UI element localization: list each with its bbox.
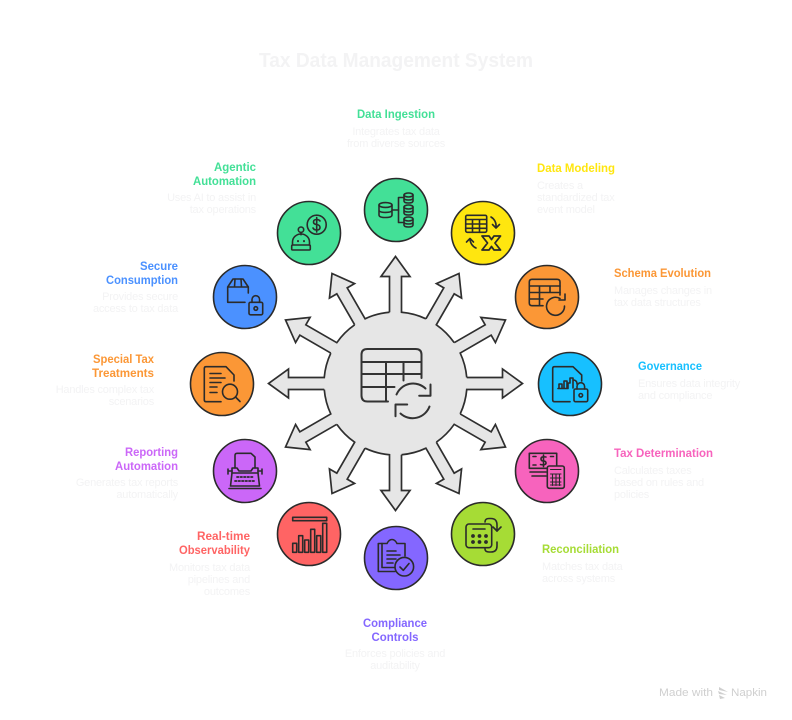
panel: Special Tax Treatments (56, 352, 254, 416)
description: Manages changes in (614, 285, 712, 297)
heading: Treatments (92, 366, 154, 380)
heading: Schema Evolution (614, 266, 711, 280)
icon: document with magnifier (190, 352, 254, 416)
icon: document chart with lock (538, 352, 602, 416)
panel: Governance (538, 352, 741, 416)
description: Ensures data integrity (638, 378, 741, 390)
description: standardized tax (537, 192, 615, 204)
panel: Agentic Automation (167, 160, 340, 264)
description: Matches tax data (542, 561, 624, 573)
heading: Data Ingestion (357, 107, 435, 121)
footer: Made with Napkin: Made with (659, 687, 713, 699)
icon: package with lock (214, 266, 276, 328)
description: scenarios (109, 396, 155, 408)
panel: Compliance Controls (345, 526, 445, 672)
icon: Napkin logo (718, 687, 728, 699)
description: Provides secure (102, 291, 178, 303)
description: across systems (542, 573, 616, 585)
description: policies (614, 489, 650, 501)
description: Monitors tax data (169, 562, 251, 574)
icon: robot bell with dollar coin (278, 202, 340, 264)
heading: Reconciliation (542, 542, 619, 556)
heading: Consumption (106, 273, 178, 287)
description: auditability (370, 660, 420, 672)
icon: databases (364, 178, 428, 242)
heading: Compliance (363, 616, 427, 630)
description: Generates tax reports (76, 477, 179, 489)
heading: Secure (140, 259, 178, 273)
description: Creates a (537, 180, 584, 192)
heading: Observability (179, 543, 250, 557)
icon: money and calculator (516, 440, 578, 502)
panel: Tax Determination (516, 440, 713, 502)
description: Calculates taxes (614, 465, 692, 477)
footer: Made with Napkin (659, 687, 767, 699)
description: Handles complex tax (56, 384, 155, 396)
description: based on rules and (614, 477, 704, 489)
panel: Secure Consumption (93, 259, 276, 328)
description: tax data structures (614, 297, 701, 309)
description: automatically (116, 489, 179, 501)
panel: Data Ingestion (347, 107, 446, 242)
heading: Governance (638, 359, 702, 373)
icon: clipboard with check (364, 526, 428, 590)
description: Uses AI to assist in (167, 192, 256, 204)
description: tax operations (190, 204, 257, 216)
panel: Reporting Automation (76, 440, 276, 502)
heading: Reporting (125, 445, 178, 459)
description: access to tax data (93, 303, 179, 315)
description: from diverse sources (347, 138, 446, 150)
icon: table refresh (516, 266, 578, 328)
central hub with radiating arrows (268, 256, 522, 510)
icon: table and transform (452, 202, 514, 264)
description: Integrates tax data (352, 126, 441, 138)
heading: Controls (372, 630, 419, 644)
icon: bar chart (278, 502, 340, 566)
icon: table with refresh arrows (362, 349, 430, 418)
heading: Real-time (197, 529, 250, 543)
panel: Reconciliation (452, 502, 624, 585)
description: and compliance (638, 390, 712, 402)
description: pipelines and (188, 574, 250, 586)
panel: Data Modeling (452, 161, 615, 264)
heading: Tax Determination (614, 446, 713, 460)
heading: Automation (115, 459, 178, 473)
icon: calculator with cycle (452, 502, 514, 566)
icon: typewriter (214, 440, 276, 502)
footer: Made with Napkin: Napkin (731, 687, 767, 699)
description: Enforces policies and (345, 648, 445, 660)
heading: Data Modeling (537, 161, 615, 175)
panel: Real-time Observability (169, 502, 340, 598)
heading: Special Tax (93, 352, 154, 366)
panel: Schema Evolution (516, 266, 712, 328)
description: event model (537, 204, 595, 216)
description: outcomes (204, 586, 251, 598)
heading: Agentic (214, 160, 256, 174)
title: Tax Data Management System (259, 50, 533, 72)
heading: Automation (193, 174, 256, 188)
